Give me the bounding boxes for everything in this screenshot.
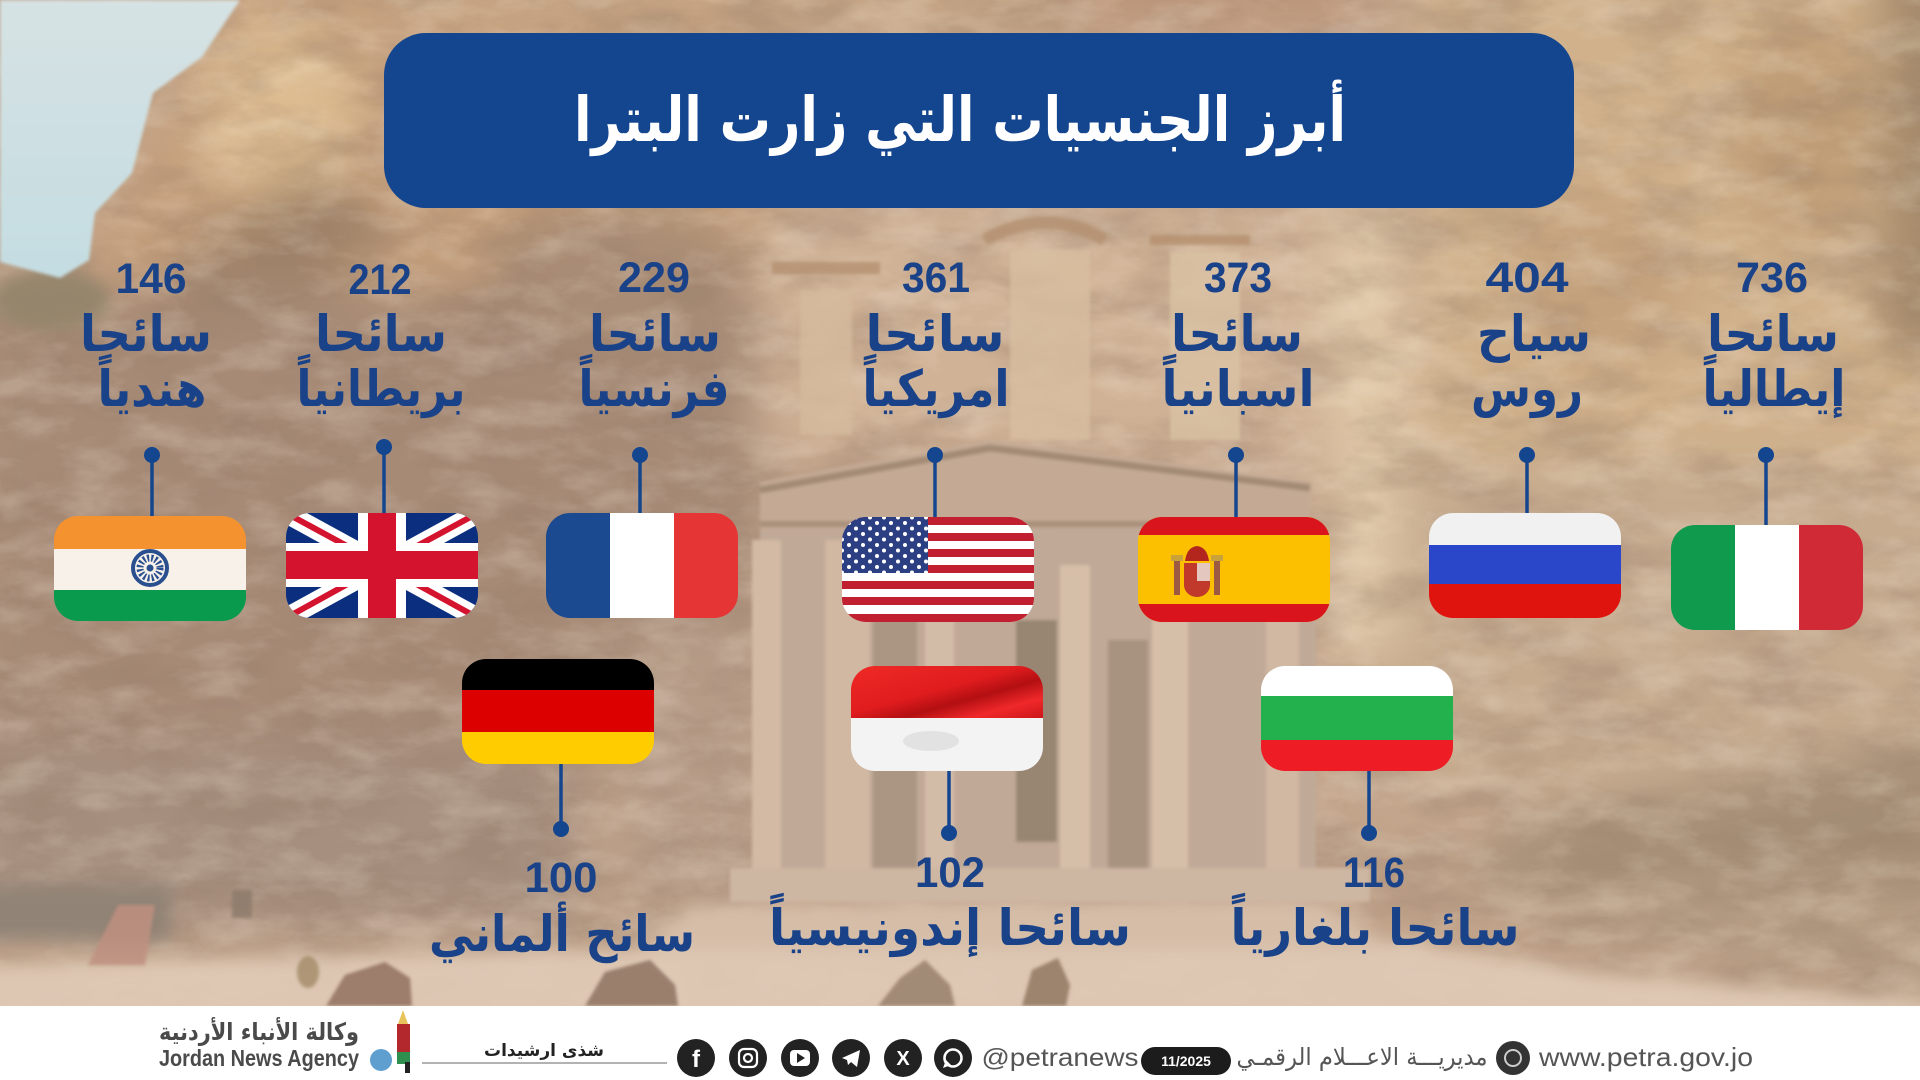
item: Indonesia 102: سائحا إندونيسياً: [769, 892, 1131, 958]
item: Spain 373: [1138, 254, 1330, 622]
item: India 146: هندياً: [98, 353, 206, 418]
title panel: [384, 33, 1574, 208]
item: UK 212: سائحا: [315, 305, 447, 363]
item: India 146: 146: [116, 255, 186, 303]
item: UK 212: بريطانياً: [296, 353, 466, 419]
item: Italy 736: إيطالياً: [1702, 353, 1846, 419]
byline: شذى ارشيدات: [484, 1041, 604, 1061]
item: Russia 404: 404: [1486, 254, 1569, 302]
website: www.petra.gov.jo: [1538, 1042, 1753, 1072]
sky: [0, 0, 240, 278]
item: Italy 736: [1671, 254, 1863, 630]
agency name: Jordan News Agency: [159, 1045, 359, 1071]
item: India 146: [54, 255, 246, 621]
item: Indonesia 102: [769, 666, 1131, 958]
item: Russia 404: سياح: [1477, 305, 1591, 363]
social icons: f: [692, 1046, 701, 1073]
item: Germany 100: [429, 659, 695, 964]
item: Spain 373: اسبانياً: [1162, 353, 1314, 418]
item: Bulgaria 116: سائحا بلغارياً: [1230, 892, 1520, 957]
item: France 229: فرنسياً: [578, 353, 730, 419]
item: USA 361: [842, 254, 1034, 622]
item: Russia 404: روس: [1471, 360, 1583, 419]
date pill: [1141, 1047, 1231, 1075]
icon: globe: [1496, 1041, 1530, 1075]
date pill: 11/2025: [1161, 1053, 1211, 1069]
icon: agency logo: [370, 1010, 410, 1073]
item: Russia 404: [1429, 254, 1621, 618]
item: USA 361: 361: [902, 254, 970, 302]
title text: أبرز الجنسيات التي زارت البترا: [574, 79, 1346, 156]
item: USA 361: امريكياً: [862, 353, 1010, 419]
item: France 229: سائحا: [589, 305, 721, 363]
item: Indonesia 102: 102: [915, 849, 985, 897]
agency name: [159, 1017, 359, 1071]
social icons: X: [896, 1048, 910, 1070]
item: France 229: [546, 254, 738, 618]
footer band: [0, 1006, 1920, 1080]
item: India 146: سائحا: [80, 305, 212, 363]
item: Bulgaria 116: [1230, 666, 1520, 957]
handle: @petranews: [982, 1044, 1138, 1072]
social icons: [677, 1039, 972, 1077]
item: USA 361: سائحا: [866, 305, 1004, 363]
item: Spain 373: 373: [1204, 254, 1272, 302]
item: Bulgaria 116: 116: [1343, 849, 1405, 897]
item: Spain 373: سائحا: [1171, 305, 1303, 363]
item: Germany 100: 100: [524, 854, 598, 902]
item: Italy 736: سائحا: [1707, 305, 1839, 363]
item: UK 212: 212: [348, 256, 412, 304]
item: UK 212: [286, 256, 478, 618]
item: Italy 736: 736: [1736, 254, 1808, 302]
item: France 229: 229: [618, 254, 690, 302]
directorate text: مديريـــة الاعـــلام الرقمـي: [1236, 1043, 1488, 1071]
agency name: وكالة الأنباء الأردنية: [159, 1017, 359, 1046]
item: Germany 100: سائح ألماني: [429, 901, 695, 964]
treasury facade: [730, 222, 1370, 902]
camels and ground details: [88, 890, 1070, 1006]
